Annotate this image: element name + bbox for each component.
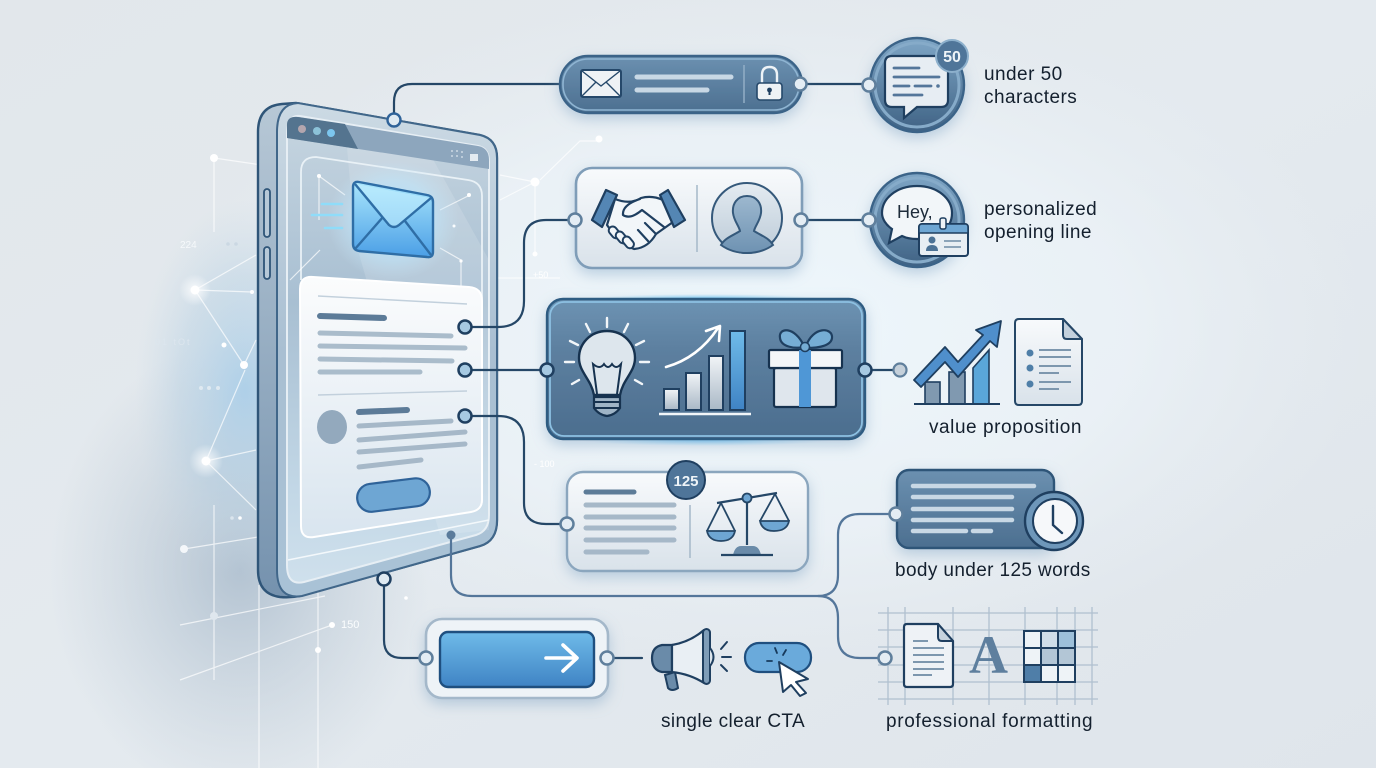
- subject and intro lines: [320, 316, 465, 372]
- icon: gift box: [769, 330, 842, 407]
- body copy lines: [586, 492, 674, 552]
- email content card: [300, 277, 482, 537]
- label: under 50 characters: under 50: [984, 64, 1063, 85]
- icon: envelope: [581, 70, 621, 97]
- glowing envelope icon: [312, 160, 459, 280]
- background network lines: - 100: [534, 459, 555, 469]
- icon: balance scale: [707, 493, 789, 555]
- panel: professional formatting: [878, 607, 1098, 705]
- id card: [919, 218, 968, 256]
- icon: handshake: [592, 190, 685, 250]
- avatar placeholder: [317, 410, 347, 444]
- icon: button with cursor: [745, 643, 811, 696]
- phone front face: [277, 103, 497, 596]
- count badge 50: 50: [943, 49, 961, 66]
- subject text lines: [637, 77, 731, 90]
- icon: light bulb: [565, 318, 649, 416]
- icon: megaphone: [652, 629, 731, 690]
- icon: arrow: [546, 645, 577, 671]
- icon: growth bars: [659, 326, 751, 414]
- background network lines: +50: [533, 270, 548, 280]
- icon: character count speech bubble badge: [862, 38, 968, 132]
- icon: personalized greeting bubble: [862, 173, 968, 267]
- icon: document with bullets: [1015, 319, 1082, 405]
- background network lines: [155, 136, 602, 768]
- icon: document: [904, 624, 953, 687]
- icon: serif letter A: A: [969, 625, 1008, 685]
- panel: personalization: [568, 168, 808, 268]
- label: personalized opening line: opening line: [984, 222, 1092, 243]
- label: under 50 characters: characters: [984, 87, 1077, 108]
- panel: subject line pill: [560, 56, 806, 113]
- phone device: [258, 103, 497, 597]
- label: single clear CTA: single clear CTA: [661, 711, 805, 732]
- formatting grid: [878, 607, 1098, 705]
- background network lines: 150: [341, 619, 359, 631]
- connector lines: [384, 84, 900, 658]
- phone connector nodes: [378, 114, 472, 586]
- icon: person avatar: [712, 183, 782, 253]
- body text lines: [359, 410, 465, 467]
- inner screen window: [301, 157, 482, 512]
- icon: personalized greeting bubble: Hey,: [897, 202, 933, 222]
- label: personalized opening line: personalized: [984, 199, 1097, 220]
- phone body shell: [258, 103, 497, 597]
- background network lines: 224: [180, 240, 197, 251]
- phone side buttons: [264, 189, 270, 237]
- icon: clock: [1025, 492, 1083, 550]
- card CTA button: [356, 477, 431, 513]
- icon: table grid: [1024, 631, 1075, 682]
- panel: value proposition: [540, 294, 872, 446]
- count badge 125: [667, 461, 705, 499]
- label: body under 125 words: body under 125 words: [895, 560, 1091, 581]
- panel: body under 125 words: [890, 470, 1083, 550]
- label: value proposition: value proposition: [929, 417, 1082, 438]
- icon: rising value chart: [914, 321, 1001, 404]
- count badge 125: 125: [673, 473, 699, 490]
- background network lines: 01 tOt: [155, 337, 192, 347]
- label: professional formatting: professional formatting: [886, 711, 1093, 732]
- panel: call to action button: [420, 619, 614, 698]
- icon: padlock: [757, 67, 782, 100]
- phone top bar: [287, 117, 489, 169]
- panel: body length and balance: [560, 461, 808, 571]
